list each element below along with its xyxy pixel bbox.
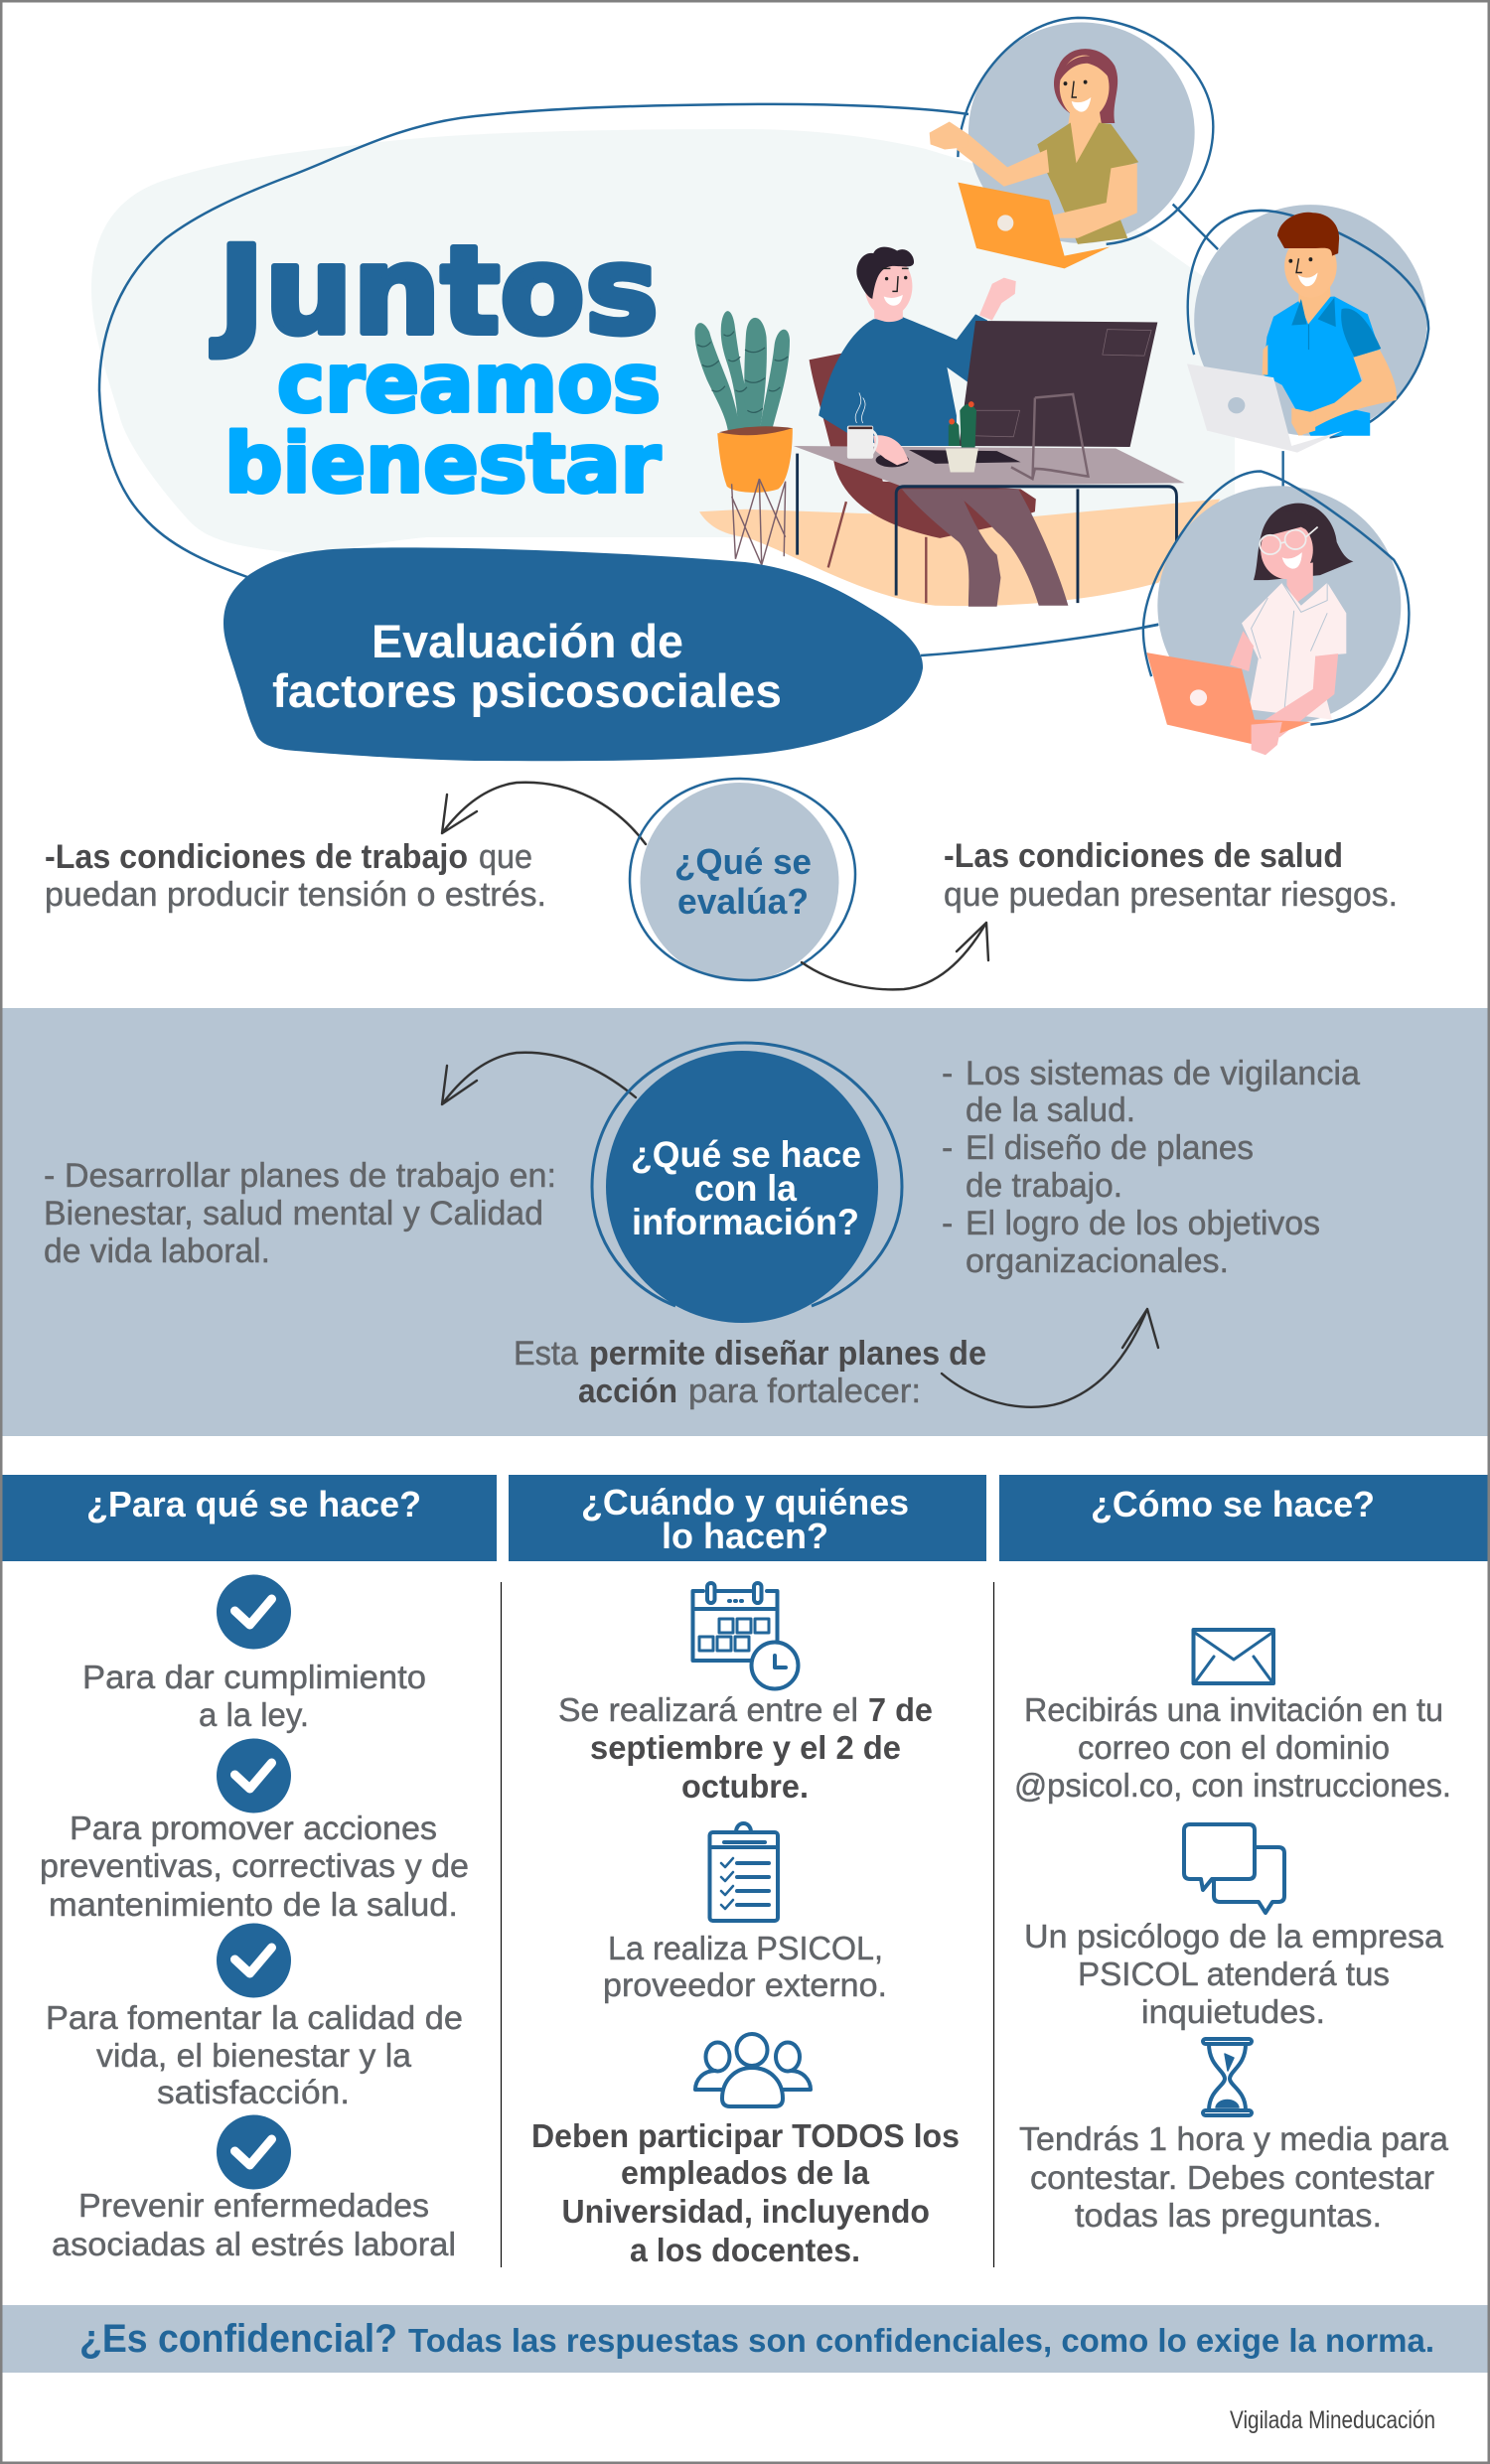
hero outline — [99, 104, 1158, 655]
text: tiempo: todas las preguntas. — [1075, 2197, 1382, 2234]
text 3 — [46, 1999, 463, 2110]
check icon 3 — [217, 1923, 291, 1998]
text 2: preventivas, correctivas y de — [40, 1847, 469, 1884]
subtitle shape — [224, 547, 923, 761]
text: invitacion: @psicol.co, con instrucciones. — [1014, 1767, 1451, 1804]
desk — [794, 446, 1185, 603]
right text: condiciones de salud — [944, 837, 1398, 914]
text: participar: a los docentes. — [630, 2232, 860, 2268]
text: fechas: 7 de — [868, 1691, 933, 1728]
text 2: Para promover acciones — [70, 1810, 437, 1846]
text: psicol: proveedor externo. — [603, 1966, 887, 2003]
chair — [810, 353, 1036, 603]
title: creamos — [277, 337, 661, 431]
column 2 header — [509, 1475, 986, 1561]
text 4 — [52, 2187, 456, 2262]
subtitle — [272, 615, 782, 717]
check icon 1 — [217, 1575, 291, 1649]
background blob — [91, 129, 1235, 553]
person 1 — [930, 18, 1213, 268]
text 4: asociadas al estrés laboral — [52, 2226, 456, 2262]
center text: permite diseñar planes de — [589, 1335, 986, 1373]
hero illustration — [695, 18, 1428, 755]
left text — [44, 1157, 556, 1270]
circle: informacion: con la — [694, 1168, 797, 1209]
plant — [695, 311, 793, 565]
text 1: Para dar cumplimiento — [82, 1659, 426, 1695]
text: participar: Universidad, incluyendo — [562, 2193, 930, 2230]
circle: informacion: ¿Qué se hace — [631, 1134, 861, 1175]
text: invitacion — [1014, 1691, 1451, 1804]
panel: confidencial: ¿Es confidencial? — [79, 2317, 397, 2361]
text: participar — [531, 2117, 960, 2268]
icon: envelope — [1194, 1630, 1273, 1683]
text: participar: Deben participar TODOS los — [531, 2117, 960, 2154]
title: Juntos — [212, 220, 659, 362]
text: psicologo: Un psicólogo de la empresa — [1024, 1918, 1444, 1955]
text 4: Prevenir enfermedades — [78, 2187, 429, 2224]
text: psicologo: inquietudes. — [1141, 1993, 1325, 2030]
column 3 header: ¿Cómo se hace? — [1091, 1484, 1375, 1524]
text 2: mantenimiento de la salud. — [49, 1886, 458, 1923]
circle: que se evalua — [630, 779, 855, 981]
panel: confidencial: Todas las respuestas son confidenciales, como lo exige la norma. — [408, 2322, 1434, 2359]
text: tiempo: Tendrás 1 hora y media para — [1019, 2120, 1449, 2157]
text: fechas — [558, 1691, 933, 1805]
text: psicologo: PSICOL atenderá tus — [1078, 1956, 1390, 1992]
right list — [942, 1055, 1360, 1280]
right list: de la salud. — [966, 1091, 1135, 1129]
icon: calendar — [693, 1583, 799, 1688]
right list: organizacionales. — [966, 1242, 1229, 1280]
icon: clipboard — [709, 1823, 778, 1921]
icon: chat — [1184, 1824, 1284, 1913]
right list: - — [942, 1055, 953, 1092]
column 2: cuando y quienes — [531, 1583, 960, 2268]
right list: El logro de los objetivos — [966, 1205, 1320, 1242]
center text — [514, 1335, 986, 1410]
text: participar: empleados de la — [621, 2154, 870, 2191]
circle: informacion: información? — [632, 1202, 859, 1242]
column 3 header — [999, 1475, 1488, 1561]
left text: condiciones de trabajo: -Las condiciones de trabajo — [45, 838, 468, 876]
text: psicol: La realiza PSICOL, — [608, 1930, 883, 1966]
person 2 — [1187, 205, 1428, 453]
text 1: a la ley. — [199, 1696, 309, 1733]
circle: que se evalua: evalúa? — [677, 881, 809, 922]
column 1: para que se hace — [40, 1575, 469, 2262]
left text: de vida laboral. — [44, 1232, 270, 1270]
check icon 4 — [217, 2115, 291, 2189]
circle: informacion — [592, 1043, 902, 1323]
left text: - Desarrollar planes de trabajo en: — [44, 1157, 556, 1195]
person 3 — [1143, 471, 1409, 755]
column 2 header: lo hacen? — [662, 1516, 828, 1556]
column 1 header: ¿Para qué se hace? — [86, 1484, 421, 1524]
icon: hourglass — [1203, 2039, 1252, 2115]
arrow right — [802, 923, 988, 989]
left text: condiciones de trabajo — [45, 838, 546, 914]
text: invitacion: correo con el dominio — [1078, 1729, 1390, 1766]
text: fechas: septiembre y el 2 de — [590, 1729, 901, 1766]
title: bienestar — [224, 417, 662, 511]
desk items — [847, 392, 1021, 473]
right list: - — [942, 1129, 953, 1167]
column 3: como se hace — [1014, 1630, 1451, 2234]
text 3: satisfacción. — [157, 2074, 350, 2110]
text: psicologo — [1024, 1918, 1444, 2030]
icon: people — [695, 2034, 811, 2106]
right list: El diseño de planes — [966, 1129, 1254, 1167]
panel: confidencial — [0, 2305, 1490, 2373]
center text: acción — [578, 1373, 677, 1410]
column 2 header: ¿Cuándo y quiénes — [581, 1482, 909, 1522]
text: fechas: Se realizará entre el — [558, 1691, 858, 1728]
text: invitacion: Recibirás una invitación en tu — [1024, 1691, 1443, 1728]
text: fechas: octubre. — [681, 1768, 809, 1805]
man at desk — [819, 247, 1068, 607]
center text: para fortalecer: — [688, 1373, 921, 1410]
title — [212, 220, 662, 511]
right list: - — [942, 1205, 953, 1242]
text 3: Para fomentar la calidad de — [46, 1999, 463, 2036]
arrow left — [442, 1053, 636, 1104]
circle: que se evalua: ¿Qué se — [674, 841, 812, 882]
subtitle: Evaluación de — [372, 615, 683, 667]
left text: condiciones de trabajo: puedan producir tensión o estrés. — [45, 876, 546, 914]
text: tiempo — [1019, 2120, 1449, 2234]
arrow right — [942, 1309, 1158, 1407]
left text: condiciones de trabajo: que — [479, 838, 532, 876]
text: psicol — [603, 1930, 887, 2003]
left text: Bienestar, salud mental y Calidad — [44, 1195, 543, 1232]
footer note: Vigilada Mineducación — [1230, 2406, 1435, 2434]
right text: condiciones de salud: que puedan presentar riesgos. — [944, 876, 1398, 914]
center text: Esta — [514, 1335, 578, 1373]
panel: que se hace con la informacion — [0, 1008, 1490, 1436]
right list: de trabajo. — [966, 1167, 1122, 1205]
arrow left — [442, 783, 646, 844]
connector — [1173, 205, 1283, 487]
column 1 header — [0, 1475, 497, 1561]
right list: Los sistemas de vigilancia — [966, 1055, 1360, 1092]
text 3: vida, el bienestar y la — [96, 2037, 412, 2074]
monitor — [959, 321, 1157, 479]
text: tiempo: contestar. Debes contestar — [1030, 2159, 1434, 2196]
subtitle: factores psicosociales — [272, 664, 782, 717]
text 1 — [82, 1659, 426, 1733]
right text: condiciones de salud: -Las condiciones de salud — [944, 837, 1343, 875]
text 2 — [40, 1810, 469, 1923]
floor — [699, 500, 1220, 606]
check icon 2 — [217, 1738, 291, 1813]
